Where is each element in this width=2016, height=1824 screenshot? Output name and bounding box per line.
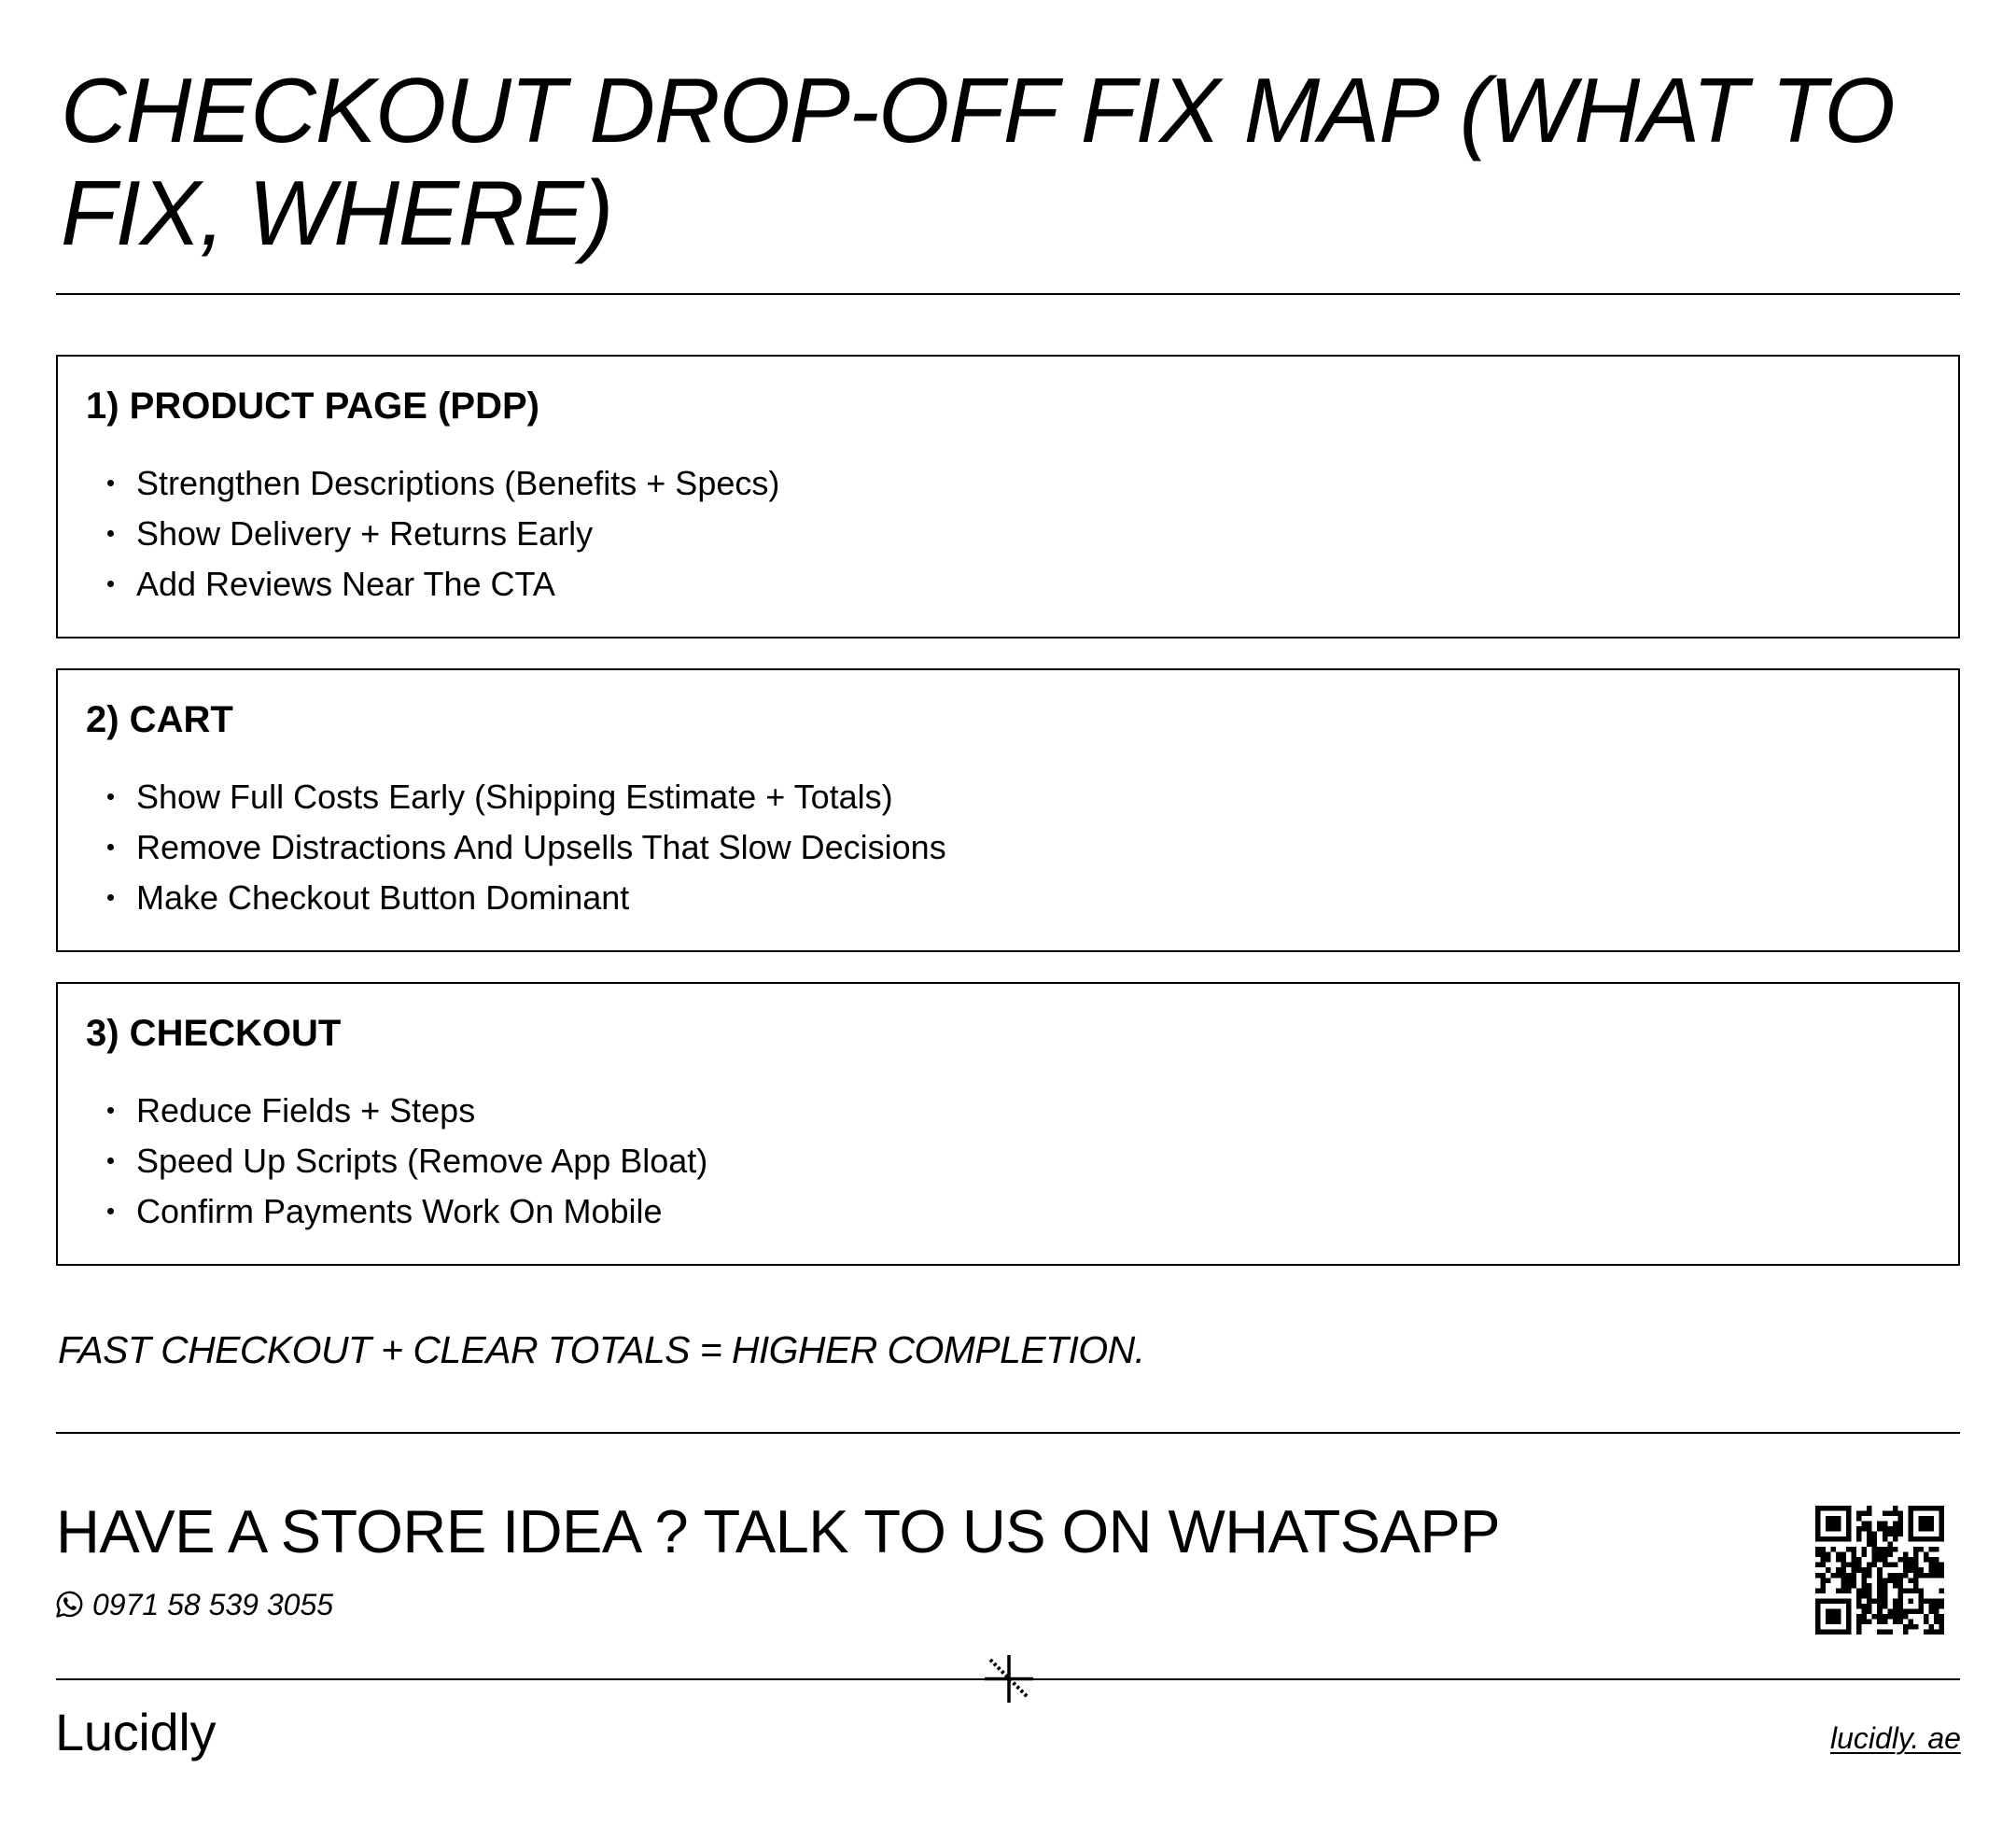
- item: full costs: Show Full Costs Early (Shipping Estimate + Totals): [136, 778, 893, 816]
- tagline: FAST CHECKOUT + CLEAR TOTALS = HIGHER COMPLETION.: [58, 1328, 1144, 1371]
- title: FIX, WHERE): [61, 161, 612, 264]
- icon: star mark: [985, 1655, 1033, 1703]
- panel: product page: [56, 355, 1960, 638]
- phone number: 0971 58 539 3055: [92, 1588, 333, 1621]
- item: reviews: Add Reviews Near The CTA: [136, 565, 555, 603]
- item: distractions: Remove Distractions And Upsells That Slow Decisions: [136, 828, 946, 866]
- website link: lucidly. ae: [1830, 1721, 1961, 1755]
- item: descriptions: Strengthen Descriptions (Benefits + Specs): [136, 464, 779, 502]
- item: scripts: Speed Up Scripts (Remove App Bloat): [136, 1142, 707, 1180]
- title: [61, 59, 1895, 264]
- heading: cart: 2) CART: [86, 699, 233, 740]
- item: payments: Confirm Payments Work On Mobile: [136, 1192, 663, 1230]
- QR code: [1815, 1506, 1944, 1635]
- panel: checkout: [56, 982, 1960, 1266]
- item: delivery: Show Delivery + Returns Early: [136, 514, 593, 553]
- heading: checkout: 3) CHECKOUT: [86, 1013, 341, 1054]
- call to action: HAVE A STORE IDEA ? TALK TO US ON WHATSAPP: [56, 1497, 1500, 1565]
- panel: cart: [56, 668, 1960, 952]
- heading: product page: 1) PRODUCT PAGE (PDP): [86, 386, 539, 427]
- icon: whatsapp: [56, 1591, 82, 1618]
- logo: Lucidly: [55, 1703, 216, 1761]
- item: fields: Reduce Fields + Steps: [136, 1091, 475, 1129]
- item: checkout button: Make Checkout Button Dominant: [136, 878, 629, 917]
- title: CHECKOUT DROP-OFF FIX MAP (WHAT TO: [61, 59, 1895, 161]
